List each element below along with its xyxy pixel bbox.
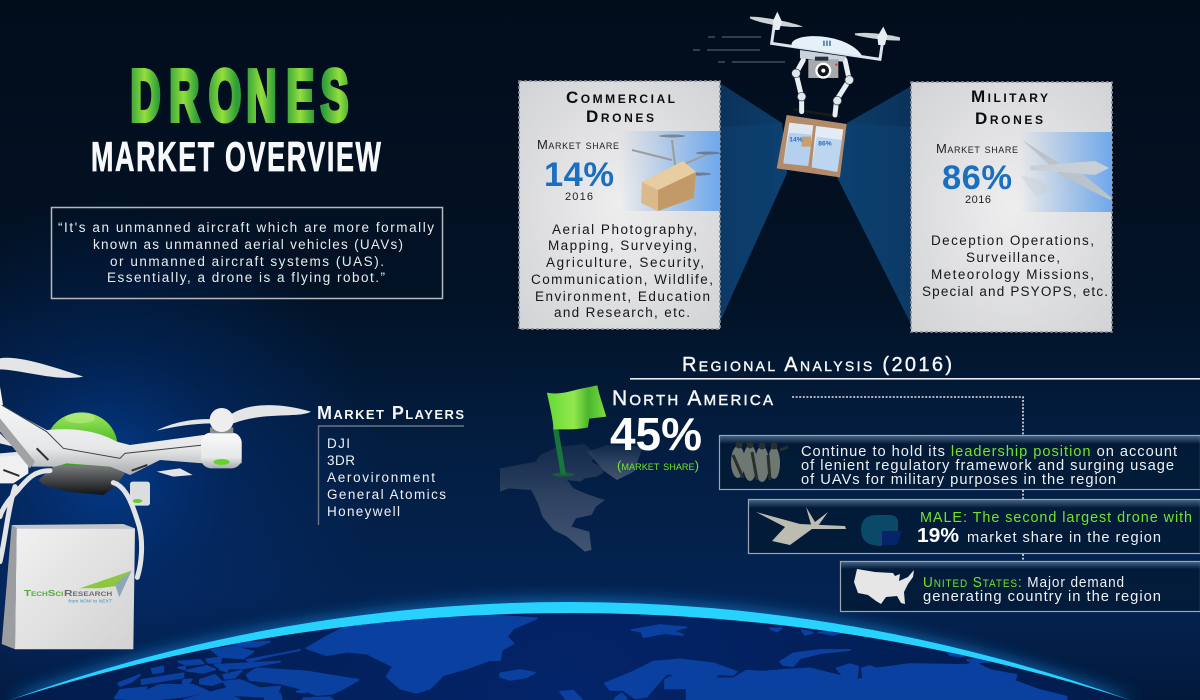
north america share [610,387,773,473]
camera [808,57,838,79]
description: Continue to hold its leadership position on account [801,443,1178,460]
panel: military drones [911,82,1112,332]
applications: Aerial Photography, [552,222,697,237]
heading: Drones [586,107,654,126]
body [0,387,242,475]
heading: Commercial [566,88,675,107]
heading [971,87,1048,128]
market players [317,403,464,525]
photo: military UAV [1020,132,1112,212]
heading: Market Players [317,403,464,423]
applications [922,233,1108,299]
description [923,574,1162,605]
description: generating country in the region [923,588,1162,605]
heading: drones: DRONES [130,57,349,136]
planet earth [4,600,1136,700]
company list: Aerovironment [327,470,435,485]
company list [327,436,446,519]
market share [537,137,619,203]
title [91,57,381,181]
icon: MALE drone [756,507,846,545]
market share: Market share [537,137,619,152]
regional analysis heading: Regional Analysis (2016) [682,354,952,376]
heading [566,88,675,126]
applications: Deception Operations, [931,233,1094,248]
map: north america [500,444,643,552]
TechSci Research logo: from NOW to NEXT [68,599,113,604]
applications: and Research, etc. [554,305,690,320]
applications: Surveillance, [966,250,1060,265]
applications: Agriculture, Security, [546,255,704,270]
market share: 2016 [565,191,593,203]
motor pod [201,408,242,468]
panel: united states [840,562,1200,612]
applications: Mapping, Surveying, [548,238,697,253]
dotted connector [792,397,1023,561]
TechSci Research logo [24,571,132,604]
north america share: (market share) [617,458,699,473]
package [777,109,847,177]
icon: USA map [854,569,914,604]
definition quote box: known as unmanned aerial vehicles (UAVs) [93,237,403,252]
TechSci Research logo: Research [64,588,112,598]
definition quote box: or unmanned aircraft systems (UAS). [110,254,384,269]
definition quote box: Essentially, a drone is a flying robot.” [107,270,385,285]
description: MALE: The second largest drone with [920,509,1193,526]
rotors [750,17,900,41]
panel: MALE drone share [748,500,1200,554]
panel: commercial drones [519,81,720,329]
heading: Military [971,87,1048,106]
underside [38,465,125,495]
TechSci Research logo: TechSci [24,588,64,598]
box [2,524,135,649]
frame [772,20,883,59]
speed lines [693,37,785,62]
rear pod [130,482,150,506]
applications: Meteorology Missions, [931,267,1094,282]
description: 19% [917,525,959,547]
applications: Communication, Wildlife, [531,272,713,287]
north america share: 45% [610,408,702,460]
description: of lenient regulatory framework and surging usage [801,457,1175,474]
rotor blades [0,358,311,477]
package: 14% [789,137,803,144]
description: of UAVs for military purposes in the region [801,471,1117,488]
icon: large white drone with package [0,358,311,649]
market share: 86% [942,159,1012,197]
package: 86% [818,141,832,148]
market share: Market share [936,141,1018,156]
applications [531,222,713,320]
north america share: North America [612,387,773,410]
icon: delivery drone carrying package [750,12,900,177]
icon: pie chart [861,515,902,546]
definition quote box: “It's an unmanned aircraft which are more formally [58,220,434,235]
company list: 3DR [327,453,355,468]
definition quote box [52,208,442,298]
company list: DJI [327,436,350,451]
description: United States: Major demand [923,574,1125,591]
description [917,509,1193,547]
icon: soldiers [731,442,788,482]
applications: Environment, Education [535,289,710,304]
heading: Drones [975,109,1043,128]
market share: 14% [544,156,614,194]
photo: drone with parcel [620,131,720,211]
heading: market overview: MARKET OVERVIEW [91,134,381,181]
icon: green flag [547,385,606,477]
market share: 2016 [965,194,991,206]
applications: Special and PSYOPS, etc. [922,284,1108,299]
description [801,443,1178,488]
market share [936,141,1018,206]
panel: leadership position [720,436,1200,490]
light beams [720,83,915,332]
company list: General Atomics [327,487,446,502]
arms [796,60,849,115]
left pod [0,455,28,483]
description: market share in the region [967,529,1162,546]
canopy [46,412,118,481]
landing legs [0,471,142,577]
company list: Honeywell [327,504,400,519]
